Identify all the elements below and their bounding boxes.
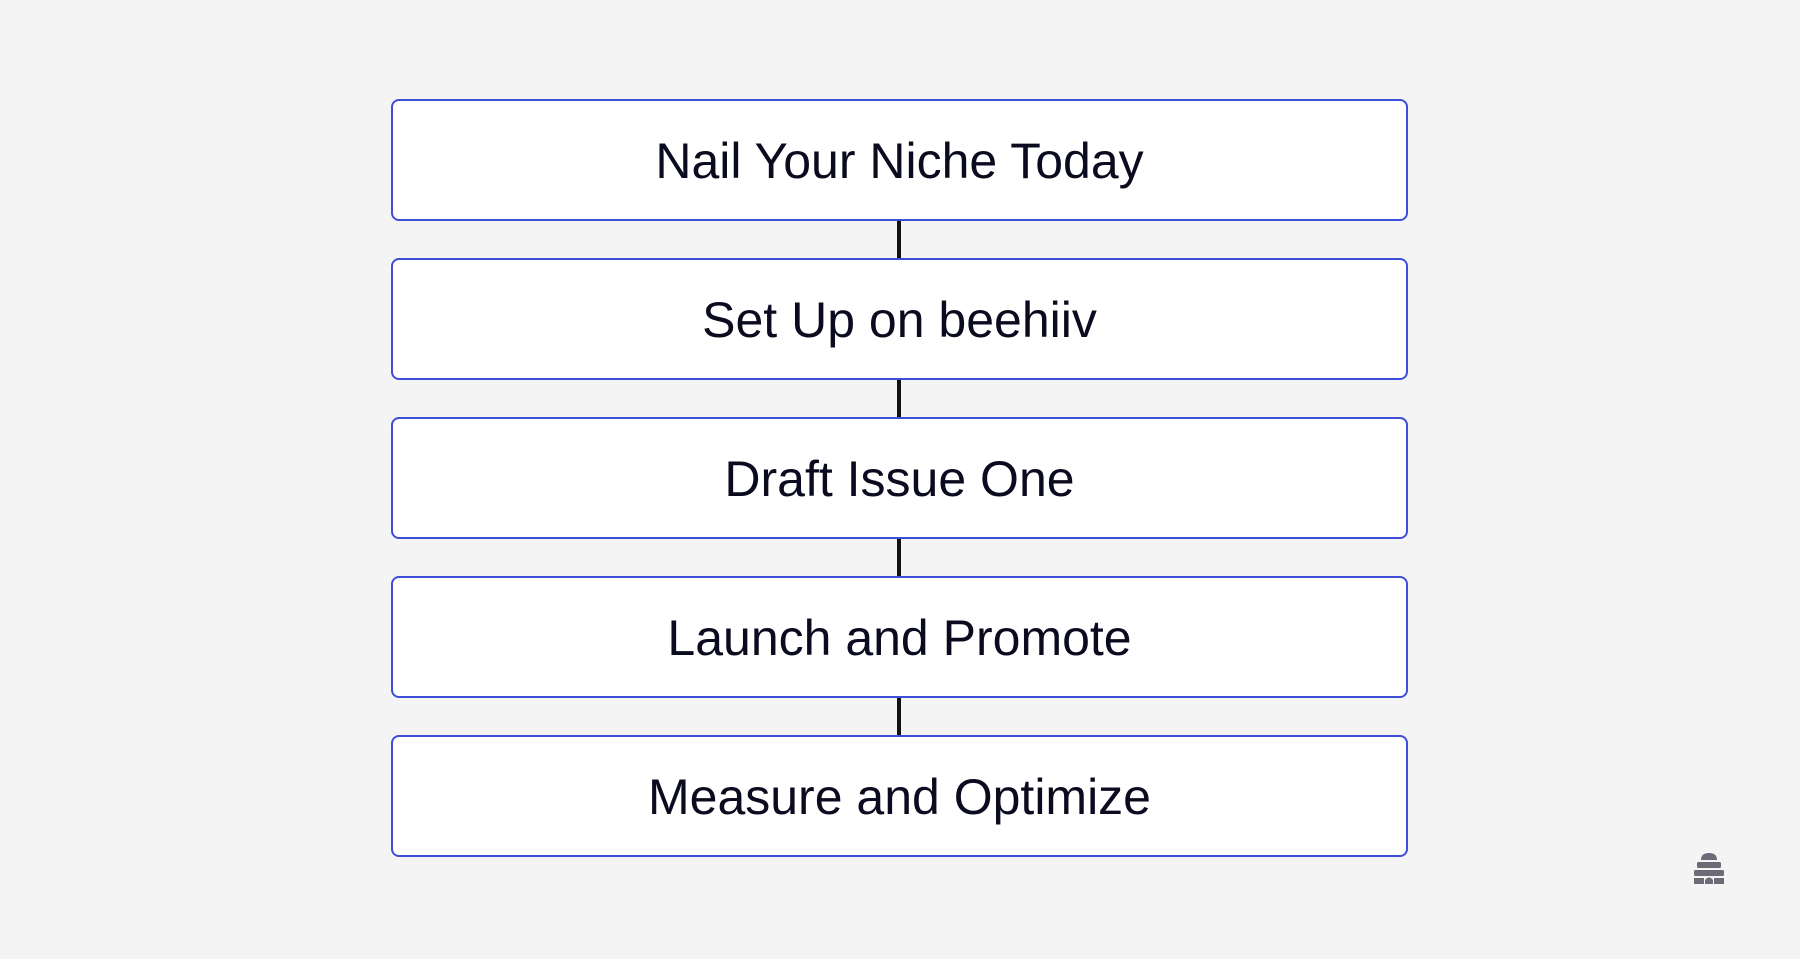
- step 2: Set Up on beehiiv: [702, 292, 1097, 348]
- step 1: Nail Your Niche Today: [655, 133, 1144, 189]
- step 1: [391, 99, 1408, 221]
- step 4: Launch and Promote: [667, 610, 1132, 666]
- icon: beehiiv logo: [1694, 853, 1724, 884]
- step 3: Draft Issue One: [724, 451, 1075, 507]
- step 3: [391, 417, 1408, 539]
- connector 4: [897, 698, 901, 735]
- connector 1: [897, 221, 901, 258]
- step 5: [391, 735, 1408, 857]
- step 4: [391, 576, 1408, 698]
- step 5: Measure and Optimize: [648, 769, 1151, 825]
- connector 2: [897, 380, 901, 417]
- step 2: [391, 258, 1408, 380]
- connector 3: [897, 539, 901, 576]
